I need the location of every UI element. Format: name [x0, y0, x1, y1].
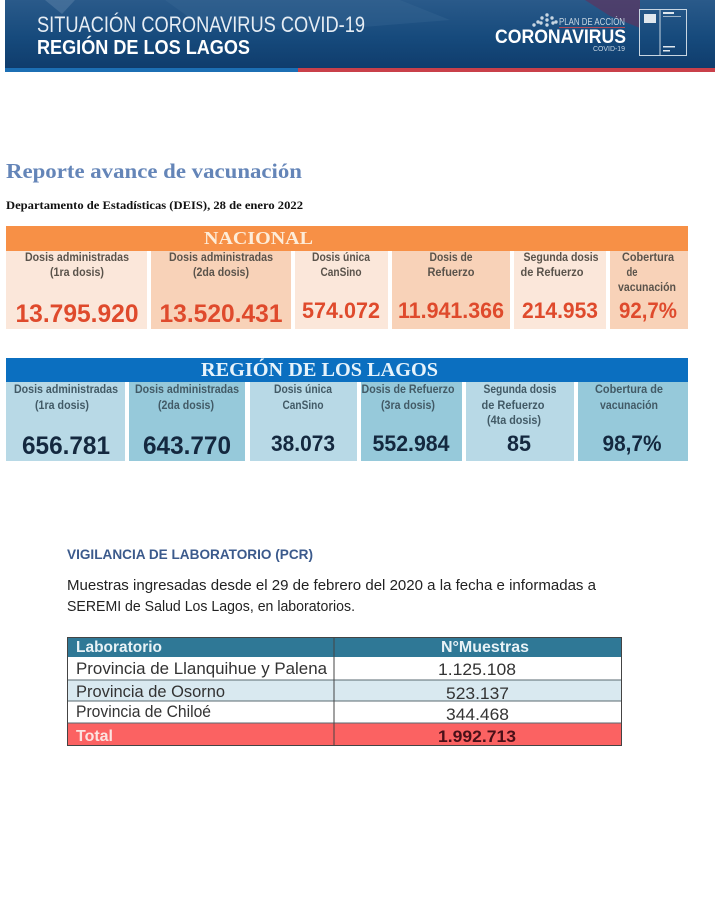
stat: cansino región: CanSino: [282, 400, 324, 412]
stat: cobertura región: [578, 382, 688, 461]
panel: nacional: [6, 226, 688, 329]
laboratory heading: VIGILANCIA DE LABORATORIO (PCR): [67, 546, 313, 562]
logo: plan de acción coronavirus: CORONAVIRUS: [495, 27, 626, 48]
stat: 2da dosis nacional: Dosis administradas: [169, 252, 273, 264]
stat: 1ra dosis región: Dosis administradas: [14, 384, 118, 396]
stat: cansino nacional: [295, 251, 388, 329]
logo: plan de acción coronavirus: COVID-19: [593, 46, 625, 53]
row: llanquihue y palena: Provincia de Llanquihue y Palena: [76, 659, 328, 678]
stat: cobertura región: 98,7%: [602, 431, 662, 456]
logo: plan de acción coronavirus: PLAN DE ACCIÓN: [559, 15, 625, 28]
stat: cobertura nacional: Cobertura: [622, 252, 675, 264]
logo: plan de acción coronavirus: [495, 13, 626, 53]
table header row: N°Muestras: [441, 639, 529, 656]
header title: SITUACIÓN CORONAVIRUS COVID-19: [37, 12, 365, 37]
stat: cuarta dosis región: 85: [507, 431, 531, 456]
report subheading: Departamento de Estadísticas (DEIS), 28 de enero 2022: [6, 200, 303, 212]
panel: región de los lagos: [6, 358, 688, 461]
stat: 2da dosis región: (2da dosis): [158, 400, 214, 412]
row: chiloé: Provincia de Chiloé: [76, 702, 211, 721]
stat: cuarta dosis región: de Refuerzo: [482, 400, 544, 412]
stat: 2da dosis nacional: (2da dosis): [193, 267, 249, 279]
table header row: [76, 639, 529, 656]
stat: 1ra dosis región: [6, 382, 125, 461]
report heading: Reporte avance de vacunación: [6, 159, 302, 183]
row: total: 1.992.713: [438, 727, 516, 746]
stat: 1ra dosis nacional: (1ra dosis): [50, 267, 104, 279]
stat: cobertura región: vacunación: [600, 400, 658, 412]
stat: refuerzo región: (3ra dosis): [381, 400, 435, 412]
stat: cansino región: Dosis única: [274, 384, 333, 396]
stat: refuerzo nacional: Dosis de: [430, 252, 472, 264]
stat: 1ra dosis nacional: 13.795.920: [16, 300, 138, 328]
stat: segunda dosis de refuerzo nacional: [514, 251, 606, 329]
stat: cansino región: [250, 382, 357, 461]
stat: 2da dosis región: [129, 382, 245, 461]
header title: REGIÓN DE LOS LAGOS: [37, 35, 250, 59]
region heading: REGIÓN DE LOS LAGOS: [201, 359, 438, 381]
stat: segunda dosis de refuerzo nacional: Segunda dosis: [524, 252, 598, 264]
stat: 2da dosis región: Dosis administradas: [135, 384, 239, 396]
row: llanquihue y palena: [76, 659, 516, 679]
row: llanquihue y palena: 1.125.108: [438, 660, 516, 679]
stat: refuerzo nacional: 11.941.366: [398, 298, 504, 323]
stat: segunda dosis de refuerzo nacional: 214.953: [522, 298, 598, 323]
stat: cobertura nacional: vacunación: [618, 282, 676, 294]
stat: 1ra dosis nacional: [6, 251, 147, 329]
stat: cuarta dosis región: [466, 382, 574, 461]
row: total: Total: [76, 728, 113, 745]
stat: refuerzo región: [361, 382, 462, 461]
header banner: [5, 0, 715, 72]
laboratory description: Muestras ingresadas desde el 29 de febrero del 2020 a la fecha e informadas a: [67, 577, 597, 594]
stat: cobertura región: Cobertura de: [595, 384, 663, 396]
stat: refuerzo nacional: [392, 251, 510, 329]
stat: refuerzo región: 552.984: [372, 431, 450, 456]
stat: 2da dosis nacional: 13.520.431: [160, 300, 283, 328]
stat: cobertura nacional: [610, 251, 688, 329]
stat: 1ra dosis región: (1ra dosis): [35, 400, 89, 412]
stat: refuerzo región: Dosis de Refuerzo: [362, 384, 454, 396]
stat: cansino nacional: Dosis única: [312, 252, 371, 264]
stat: cansino región: 38.073: [271, 431, 335, 456]
stat: 2da dosis región: 643.770: [143, 432, 231, 460]
row: chiloé: 344.468: [446, 705, 509, 724]
stat: 1ra dosis región: 656.781: [22, 432, 110, 460]
row: osorno: 523.137: [446, 684, 509, 703]
laboratory description: SEREMI de Salud Los Lagos, en laboratorios.: [67, 598, 355, 615]
table header row: Laboratorio: [76, 639, 162, 656]
row: total: [76, 727, 516, 746]
row: osorno: Provincia de Osorno: [76, 682, 225, 701]
stat: cansino nacional: CanSino: [320, 267, 362, 279]
row: chiloé: [76, 702, 509, 724]
stat: 1ra dosis nacional: Dosis administradas: [25, 252, 129, 264]
stat: cobertura nacional: 92,7%: [619, 298, 677, 323]
stat: 2da dosis nacional: [151, 251, 291, 329]
row: osorno: [76, 682, 509, 703]
stat: refuerzo nacional: Refuerzo: [428, 267, 474, 279]
stat: cuarta dosis región: Segunda dosis: [484, 384, 556, 396]
nacional heading: NACIONAL: [204, 228, 313, 248]
logo: ministerio de salud: [640, 10, 686, 56]
stat: segunda dosis de refuerzo nacional: de Refuerzo: [520, 267, 584, 279]
stat: cansino nacional: 574.072: [302, 298, 380, 323]
stat: cobertura nacional: de: [626, 267, 638, 279]
table: muestras por provincia: [67, 637, 622, 746]
header title: [37, 12, 365, 59]
stat: cuarta dosis región: (4ta dosis): [487, 415, 541, 427]
laboratory description: [67, 577, 597, 615]
